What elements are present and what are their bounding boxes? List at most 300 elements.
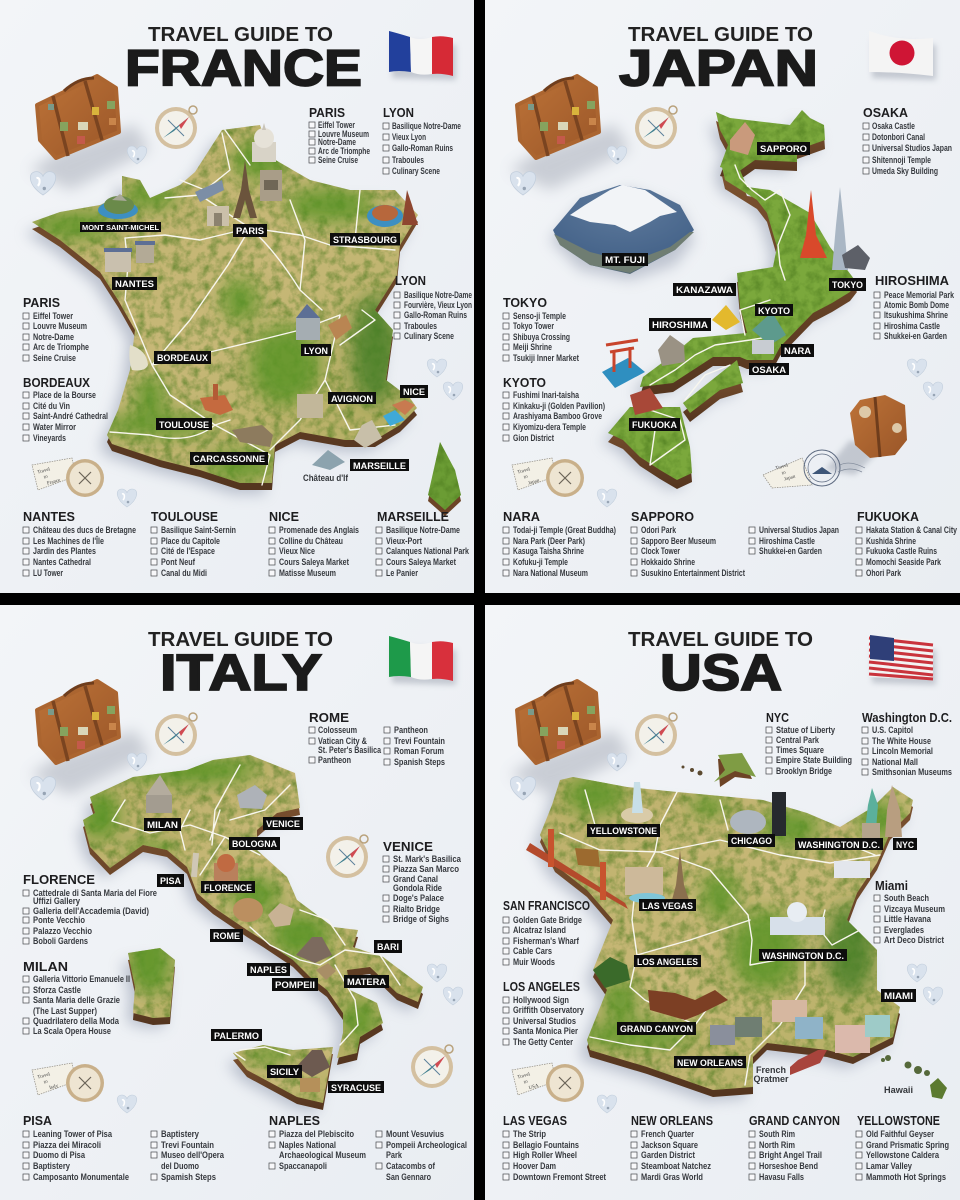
checklist: Nara: Todai-ji Temple (Great Buddha) xyxy=(513,525,616,535)
label: Kanazawa: KANAZAWA xyxy=(676,285,734,295)
checklist: San Francisco xyxy=(503,899,590,967)
checklist: Bordeaux: Cité du Vin xyxy=(33,401,70,411)
icon: compass xyxy=(635,106,677,149)
checklist: Nantes: Château des ducs de Bretagne xyxy=(33,525,136,535)
checklist: Osaka: Dotonbori Canal xyxy=(872,132,925,142)
label: Sicily xyxy=(267,1065,302,1078)
label: Nantes: NANTES xyxy=(115,279,154,289)
checklist: Paris (left): Louvre Museum xyxy=(33,321,87,331)
checklist: Miami: Little Havana xyxy=(884,914,932,924)
checklist: Tokyo xyxy=(503,296,579,363)
checklist: Florence: Palazzo Vecchio xyxy=(33,926,92,936)
landmark: Bellagio xyxy=(625,867,665,903)
checklist: Lyon (right): LYON xyxy=(395,274,426,288)
checklist: Venice xyxy=(383,840,462,924)
label: Pisa: PISA xyxy=(160,876,182,886)
landmark: Bordeaux mirror xyxy=(129,345,148,370)
checklist: Lyon (top): Traboules xyxy=(392,155,424,165)
label: Lyon: LYON xyxy=(304,346,328,356)
label: Fukuoka xyxy=(629,418,680,431)
landmark: Venice xyxy=(237,785,267,809)
checklist: Grand Canyon: Havasu Falls xyxy=(759,1172,804,1182)
checklist: Toulouse xyxy=(151,510,236,578)
landmark: Tokyo Tower xyxy=(800,190,827,258)
checklist: Washington D.C.: National Mall xyxy=(872,757,918,767)
landmark: Old Faithful xyxy=(621,782,653,823)
landmark: Osaka Castle xyxy=(752,312,786,354)
checklist: Florence xyxy=(23,873,157,946)
checklist: Pisa: Baptistery xyxy=(33,1161,70,1171)
checklist: Paris (top): Arc de Triomphe xyxy=(318,146,370,156)
checklist: Nantes: Nantes Cathedral xyxy=(33,557,91,567)
icon: crystal heart xyxy=(907,964,927,982)
landmark: Pompeii xyxy=(316,963,336,980)
landmark: Syracuse temple xyxy=(300,1078,320,1092)
checklist: Venice: Rialto Bridge xyxy=(393,904,440,914)
label: Bologna: BOLOGNA xyxy=(232,839,278,849)
checklist: Milan: Sforza Castle xyxy=(33,985,81,995)
checklist: Grand Canyon xyxy=(749,1114,840,1182)
icon: crystal heart xyxy=(443,382,463,400)
checklist: Lyon (right): Culinary Scene xyxy=(404,331,454,341)
checklist: Bordeaux: Water Mirror xyxy=(33,422,76,432)
checklist: Miami: Art Deco District xyxy=(884,935,944,945)
checklist: Florence: Ponte Vecchio xyxy=(33,915,85,925)
checklist: Florence: Cattedrale di Santa Maria del Fiore xyxy=(33,888,157,898)
checklist: Bordeaux: Place de la Bourse xyxy=(33,390,96,400)
label: Pisa xyxy=(157,874,184,887)
checklist: Naples: Catacombs of xyxy=(386,1161,436,1171)
label: Syracuse: SYRACUSE xyxy=(331,1083,381,1093)
icon: crystal heart xyxy=(117,489,137,507)
checklist: Kyoto: Arashiyama Bamboo Grove xyxy=(513,411,602,421)
checklist: Naples: Archaeological Museum xyxy=(279,1150,366,1160)
landmark: Notre-Dame xyxy=(260,170,282,201)
label: Sicily: SICILY xyxy=(270,1067,299,1077)
label: Sapporo: SAPPORO xyxy=(760,144,807,154)
label: French Qratmer: French xyxy=(756,1065,786,1075)
checklist: Paris (top): Eiffel Tower xyxy=(318,120,355,130)
icon: travel tag and compass: Japan xyxy=(528,479,540,486)
icon: compass xyxy=(155,106,197,149)
checklist: Pisa: Spamish Steps xyxy=(161,1172,216,1182)
label: Hawaii: Hawaii xyxy=(884,1085,913,1095)
label: Yellowstone: YELLOWSTONE xyxy=(590,826,657,836)
label: Matera xyxy=(344,975,389,988)
checklist: Rome xyxy=(309,711,445,767)
icon: suitcase xyxy=(510,681,630,795)
label: Fukuoka: FUKUOKA xyxy=(632,420,678,430)
checklist: NYC: Central Park xyxy=(776,735,820,745)
landmark: Pantheon xyxy=(268,903,294,927)
title: Travel Guide to France: TRAVEL GUIDE TO xyxy=(148,24,333,46)
icon: travel tag and compass: to xyxy=(43,474,49,480)
landmark: Mont Saint-Michel xyxy=(98,194,138,219)
checklist: Paris (top) xyxy=(309,106,370,165)
icon: suitcase xyxy=(30,76,150,190)
checklist: Rome: Spanish Steps xyxy=(394,757,445,767)
checklist: NYC: Times Square xyxy=(776,745,824,755)
checklist: Nara: Kofuku-ji Temple xyxy=(513,557,568,567)
label: Osaka xyxy=(749,363,789,375)
icon: travel tag and compass xyxy=(32,458,104,497)
checklist: extra column: Shukkei-en Garden xyxy=(759,546,822,556)
icon: crystal heart xyxy=(427,359,447,377)
checklist: Pisa: Baptistery xyxy=(161,1129,199,1139)
checklist: Milan: Quadrilatero della Moda xyxy=(33,1016,120,1026)
checklist: Nara: Nara National Museum xyxy=(513,568,588,578)
checklist: Nantes: Jardin des Plantes xyxy=(33,546,96,556)
label: French Qratmer: Qratmer xyxy=(753,1074,789,1084)
icon: torii gate xyxy=(602,340,645,388)
landmark: Marseille basilica xyxy=(354,420,382,448)
label: Kyoto xyxy=(755,304,793,316)
checklist: Nice xyxy=(269,510,359,578)
checklist: Bordeaux xyxy=(23,376,108,443)
checklist: Washington D.C.: Washington D.C. xyxy=(862,711,952,725)
icon: crystal heart xyxy=(127,753,147,771)
landmark: Louvre xyxy=(195,180,224,202)
checklist: Sapporo: Clock Tower xyxy=(641,546,680,556)
label: Chicago: CHICAGO xyxy=(731,836,772,846)
icon: suitcase xyxy=(30,681,150,795)
panel: Italy xyxy=(0,605,474,1200)
icon: travel tag and compass xyxy=(32,1063,104,1102)
landmark: Grand Canyon xyxy=(648,990,728,1020)
checklist: Naples: Piazza del Plebiscito xyxy=(279,1129,354,1139)
map: France relief xyxy=(25,123,461,516)
checklist: Nice: Matisse Museum xyxy=(279,568,336,578)
landmark: Nice seafront xyxy=(383,400,415,426)
landmark: U.S. Capitol xyxy=(770,902,825,935)
checklist: San Francisco: Cable Cars xyxy=(513,946,552,956)
icon: crystal heart xyxy=(30,172,56,195)
panel: France xyxy=(0,0,474,593)
icon: Japanese flag xyxy=(869,31,936,80)
landmark: Milan Duomo xyxy=(146,775,172,813)
checklist: Nantes xyxy=(23,510,136,578)
checklist: Kyoto: Kinkaku-ji (Golden Pavilion) xyxy=(513,401,605,411)
icon: crystal heart xyxy=(127,146,147,164)
checklist: San Francisco: Golden Gate Bridge xyxy=(513,915,582,925)
checklist: Los Angeles xyxy=(503,980,584,1047)
checklist: New Orleans xyxy=(631,1114,713,1182)
icon: travel tag and compass: Travel xyxy=(517,467,531,476)
label: Venice: VENICE xyxy=(266,819,300,829)
label: Carcassonne xyxy=(190,452,268,465)
map: Italy relief xyxy=(77,755,423,1113)
label: Las Vegas: LAS VEGAS xyxy=(642,901,693,911)
icon: steamboat xyxy=(790,1050,827,1075)
checklist: Florence: Galleria dell'Accademia (David) xyxy=(33,906,149,916)
label: Mt. Fuji: MT. FUJI xyxy=(605,255,645,265)
checklist: Los Angeles: Santa Monica Pier xyxy=(513,1026,578,1036)
checklist: Kyoto: Fushimi Inari-taisha xyxy=(513,390,580,400)
icon: travel tag and compass: Travel xyxy=(37,467,51,476)
checklist: Marseille: Calanques National Park xyxy=(386,546,470,556)
checklist: Milan: La Scala Opera House xyxy=(33,1026,111,1036)
checklist: Paris (top): PARIS xyxy=(309,106,345,120)
label: Pompeii xyxy=(272,978,318,991)
landmark: Eiffel Tower xyxy=(233,160,257,218)
checklist: Nice: Cours Saleya Market xyxy=(279,557,349,567)
checklist: Lyon (top) xyxy=(383,106,461,176)
checklist: Rome: ROME xyxy=(309,711,349,725)
checklist: San Francisco: Alcatraz Island xyxy=(513,925,566,935)
roads xyxy=(650,165,790,465)
checklist: Nara xyxy=(503,510,616,578)
checklist: Osaka: Umeda Sky Building xyxy=(872,166,938,176)
checklist: Sapporo: Sapporo Beer Museum xyxy=(641,536,716,546)
label: Sapporo xyxy=(757,142,810,155)
icon: crystal heart xyxy=(510,172,536,195)
landmark: Carcassonne walls xyxy=(232,425,273,447)
checklist: Lyon (top): Basilique Notre-Dame xyxy=(392,121,461,131)
checklist: Paris (left) xyxy=(23,296,89,363)
checklist: New Orleans: Jackson Square xyxy=(641,1140,698,1150)
label: Tokyo xyxy=(829,278,866,291)
checklist: Sapporo xyxy=(631,510,745,578)
label: Kyoto: KYOTO xyxy=(758,306,790,316)
label: Tokyo: TOKYO xyxy=(832,280,863,290)
checklist: Fukuoka: Ohori Park xyxy=(866,568,902,578)
checklist: San Francisco: Muir Woods xyxy=(513,957,555,967)
checklist: Osaka: Osaka Castle xyxy=(872,121,915,131)
checklist: Fukuoka: Kushida Shrine xyxy=(866,536,916,546)
label: Los Angeles: LOS ANGELES xyxy=(637,957,698,967)
label: Avignon: AVIGNON xyxy=(331,394,373,404)
icon: crystal heart xyxy=(443,987,463,1005)
checklist: Las Vegas: The Strip xyxy=(513,1129,546,1139)
landmark: cable car xyxy=(575,848,600,867)
landmark: Florence Duomo xyxy=(214,854,238,881)
checklist: Naples xyxy=(269,1114,467,1182)
icon: Italian flag xyxy=(389,636,456,685)
checklist: New Orleans: French Quarter xyxy=(641,1129,694,1139)
icon: crystal heart xyxy=(907,359,927,377)
checklist: Yellowstone: YELLOWSTONE xyxy=(857,1114,940,1128)
label: Florence: FLORENCE xyxy=(204,883,252,893)
checklist: Venice: Doge's Palace xyxy=(393,893,444,903)
checklist: Pisa: Piazza dei Miracoli xyxy=(33,1140,101,1150)
icon: crystal heart xyxy=(923,382,943,400)
checklist: Grand Canyon: Bright Angel Trail xyxy=(759,1150,822,1160)
label: NYC: NYC xyxy=(896,840,915,850)
checklist: Kyoto xyxy=(503,376,605,443)
checklist: Florence: FLORENCE xyxy=(23,873,95,887)
checklist: Las Vegas xyxy=(503,1114,606,1182)
checklist: Milan: (The Last Supper) xyxy=(33,1006,97,1016)
checklist: Kyoto: Kiyomizu-dera Temple xyxy=(513,422,586,432)
checklist: Rome: Pantheon xyxy=(394,725,428,735)
checklist: Venice: Piazza San Marco xyxy=(393,864,459,874)
icon: travel tag and postmark: Japan xyxy=(784,475,796,482)
checklist: Los Angeles: Griffith Observatory xyxy=(513,1005,584,1015)
checklist: Marseille: MARSEILLE xyxy=(377,510,449,524)
checklist: Tokyo: Tokyo Tower xyxy=(513,321,554,331)
icon: crystal heart xyxy=(607,146,627,164)
checklist: Milan: Santa Maria delle Grazie xyxy=(33,995,120,1005)
landmark: Colosseum xyxy=(233,898,263,922)
label: Miami: MIAMI xyxy=(884,991,913,1001)
icon: travel tag and postmark: to xyxy=(781,470,787,476)
checklist: Rome: St. Peter's Basilica xyxy=(318,745,382,755)
checklist: Pisa: Museo dell'Opera xyxy=(161,1150,225,1160)
checklist: Hiroshima xyxy=(874,274,955,341)
label: Marseille: MARSEILLE xyxy=(353,461,406,471)
checklist: Yellowstone: Mammoth Hot Springs xyxy=(866,1172,946,1182)
landmark: Avignon palace xyxy=(297,394,323,418)
checklist: Rome: Colosseum xyxy=(318,725,357,735)
landmark: Vesuvius xyxy=(296,937,332,963)
landmark: Willis Tower xyxy=(772,792,786,836)
title: Travel Guide to Italy: TRAVEL GUIDE TO xyxy=(148,629,333,651)
checklist: Naples: San Gennaro xyxy=(386,1172,431,1182)
checklist: Rome: Trevi Fountain xyxy=(394,736,445,746)
icon: travel tag and compass: USA xyxy=(528,1084,540,1091)
checklist: Marseille: Basilique Notre-Dame xyxy=(386,525,460,535)
checklist: Hiroshima: Hiroshima Castle xyxy=(884,321,940,331)
landmark: Paris Las Vegas tower xyxy=(672,850,689,900)
label: New Orleans: NEW ORLEANS xyxy=(677,1058,743,1068)
checklist: NYC: NYC xyxy=(766,711,789,725)
checklist: Las Vegas: Hoover Dam xyxy=(513,1161,556,1171)
checklist: Nantes: LU Tower xyxy=(33,568,63,578)
checklist: Venice: Grand Canal xyxy=(393,874,438,884)
checklist: Nice: Promenade des Anglais xyxy=(279,525,359,535)
checklist: Bordeaux: Vineyards xyxy=(33,433,66,443)
label: Osaka: OSAKA xyxy=(752,365,787,375)
checklist: Osaka xyxy=(863,106,952,176)
icon: crystal heart xyxy=(923,987,943,1005)
map: Hawaii islands xyxy=(881,1055,947,1099)
checklist: Nice: Colline du Château xyxy=(279,536,343,546)
label: Washington D.C. (centre): WASHINGTON D.C. xyxy=(762,951,844,961)
map: USA relief xyxy=(526,775,917,1101)
label: Palermo: PALERMO xyxy=(214,1031,259,1041)
icon: crystal heart xyxy=(510,777,536,800)
landmark: Nantes castle xyxy=(104,241,155,272)
landmark: Statue of Liberty xyxy=(862,788,880,839)
checklist: Naples: Pompeii Archeological xyxy=(386,1140,467,1150)
checklist: Grand Canyon: South Rim xyxy=(759,1129,795,1139)
label: Hiroshima: HIROSHIMA xyxy=(652,320,709,330)
checklist: Sapporo: Susukino Entertainment District xyxy=(641,568,745,578)
checklist: Osaka: OSAKA xyxy=(863,106,908,120)
icon: travel tag and compass: to xyxy=(43,1079,49,1085)
checklist: Lyon (top): LYON xyxy=(383,106,414,120)
checklist: Sapporo: SAPPORO xyxy=(631,510,694,524)
roads xyxy=(110,130,395,485)
checklist: Naples: Park xyxy=(386,1150,403,1160)
checklist: Osaka: Shitennoji Temple xyxy=(872,155,931,165)
label: Nice xyxy=(400,385,428,398)
title: Travel Guide to Japan: TRAVEL GUIDE TO xyxy=(628,24,813,46)
checklist: Marseille: Le Panier xyxy=(386,568,418,578)
icon: travel tag and compass: France xyxy=(47,478,62,487)
checklist: Pisa: del Duomo xyxy=(161,1161,199,1171)
checklist: Naples: Naples National xyxy=(279,1140,336,1150)
icon: compass xyxy=(411,1045,453,1088)
checklist: Nara: NARA xyxy=(503,510,540,524)
checklist: Grand Canyon: Horseshoe Bend xyxy=(759,1161,818,1171)
checklist: Washington D.C.: The White House xyxy=(872,736,931,746)
checklist: Tokyo: Meiji Shrine xyxy=(513,342,552,352)
landmark: Hiroshima dome xyxy=(658,335,685,366)
label: Venice xyxy=(263,817,303,830)
label: Strasbourg: STRASBOURG xyxy=(333,235,397,245)
checklist: Pisa: Duomo di Pisa xyxy=(33,1150,86,1160)
checklist: Pisa xyxy=(23,1114,225,1182)
checklist: Rome: Roman Forum xyxy=(394,746,444,756)
landmark: Hollywood hills xyxy=(593,957,630,988)
checklist: Lyon (right) xyxy=(394,274,472,341)
label: Hiroshima xyxy=(649,318,711,331)
icon: travel tag and compass: Travel xyxy=(37,1072,51,1081)
checklist: Nantes: Les Machines de l'Île xyxy=(33,535,104,546)
checklist: Los Angeles: LOS ANGELES xyxy=(503,980,580,994)
checklist: Hiroshima: HIROSHIMA xyxy=(875,274,949,288)
landmark: Etna xyxy=(296,1050,330,1077)
icon: crystal heart xyxy=(30,777,56,800)
checklist: Kyoto: KYOTO xyxy=(503,376,546,390)
checklist: Venice: St. Mark's Basilica xyxy=(393,854,462,864)
title: Travel Guide to Italy xyxy=(148,629,333,701)
checklist: Paris (left): Eiffel Tower xyxy=(33,311,73,321)
panel: USA xyxy=(485,605,960,1200)
checklist: Las Vegas: Downtown Fremont Street xyxy=(513,1172,606,1182)
checklist: Toulouse: TOULOUSE xyxy=(151,510,218,524)
checklist: Marseille xyxy=(376,510,470,578)
checklist: Venice: VENICE xyxy=(383,840,433,854)
checklist: Toulouse: Canal du Midi xyxy=(161,568,207,578)
landmark: Fukuoka temple xyxy=(630,388,663,415)
landmark: Cloud Gate xyxy=(730,810,766,834)
label: Nice: NICE xyxy=(403,387,425,397)
label: Carcassonne: CARCASSONNE xyxy=(193,454,265,464)
checklist: Tokyo: Shibuya Crossing xyxy=(513,332,570,342)
label: Paris xyxy=(233,224,267,237)
checklist: Toulouse: Cité de l'Espace xyxy=(161,546,215,556)
label: Kanazawa xyxy=(673,283,736,296)
checklist: NYC: Statue of Liberty xyxy=(776,725,835,735)
label: Bologna xyxy=(229,837,280,850)
checklist: extra column xyxy=(749,525,839,556)
checklist: Los Angeles: Hollywood Sign xyxy=(513,995,569,1005)
map: Corsica xyxy=(428,442,461,516)
label: Naples xyxy=(247,963,290,976)
label: Washington D.C. (north): WASHINGTON D.C. xyxy=(798,840,880,850)
landmark: Leaning Tower xyxy=(191,853,199,877)
label: Mont Saint-Michel: MONT SAINT-MICHEL xyxy=(82,225,160,232)
icon: travel tag and compass xyxy=(512,458,584,497)
landmark: Arc de Triomphe xyxy=(207,206,229,226)
checklist: Lyon (right): Gallo-Roman Ruins xyxy=(404,310,467,320)
checklist: Kyoto: Gion District xyxy=(513,433,554,443)
checklist: Paris (top): Louvre Museum xyxy=(318,129,369,139)
checklist: Rome: Vatican City & xyxy=(318,736,367,746)
checklist: Yellowstone xyxy=(856,1114,949,1182)
label: Nantes xyxy=(112,277,157,290)
landmark: Chateau d'If xyxy=(312,450,345,470)
icon: crystal heart xyxy=(597,489,617,507)
icon: suitcase xyxy=(510,76,630,190)
map: Alaska xyxy=(682,753,756,787)
landmark: New Orleans houses xyxy=(710,1017,762,1045)
title: Travel Guide to USA xyxy=(628,629,813,701)
roads xyxy=(112,765,400,1060)
checklist: Paris (top): Notre-Dame xyxy=(318,137,356,147)
